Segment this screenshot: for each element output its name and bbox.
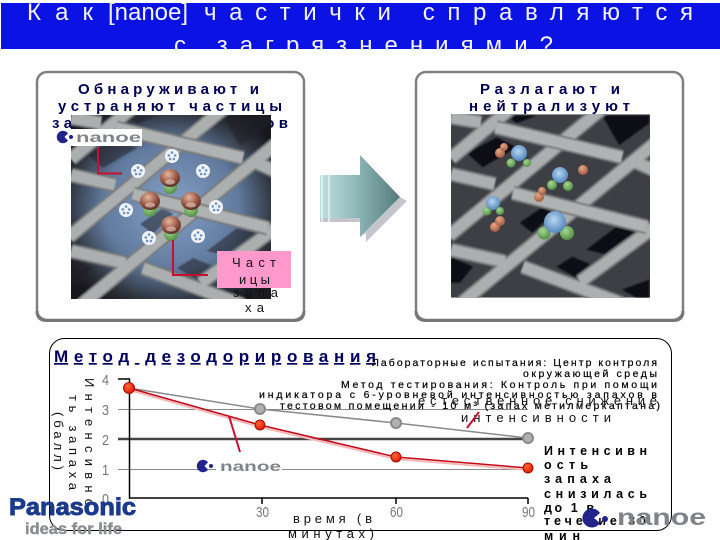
test conditions note: окружающей среды (523, 368, 657, 380)
nanoe series (124, 382, 533, 473)
axis tick labels: 3 (102, 402, 109, 419)
title text (27, 0, 693, 59)
illustration: fabric with decomposed molecules (449, 108, 656, 304)
panel: deodorization method (50, 338, 672, 540)
y-axis label: (балл) (51, 412, 66, 470)
callout: odor particles: ха (245, 300, 265, 315)
axis tick labels: 1 (102, 462, 109, 479)
test conditions note: Метод тестирования: Контроль при помощи (341, 379, 657, 391)
chart: odor intensity over time (51, 372, 535, 521)
y-axis label: Интенсивно (82, 378, 97, 506)
Panasonic logo: ideas for life (25, 521, 122, 538)
nanoe logo on chart (197, 458, 282, 474)
callout: odor particles (217, 251, 291, 315)
result note: запаха (544, 472, 612, 486)
panel heading: detect and remove: устраняют частицы (58, 98, 282, 115)
label: natural decline of intensity: естественное снижение (418, 393, 657, 408)
axis tick labels (102, 372, 535, 521)
axis tick labels: 90 (522, 504, 535, 521)
red leader to nanoe series (229, 416, 240, 452)
Panasonic logo (9, 494, 136, 538)
title text: с загрязнениями? (174, 32, 553, 59)
test conditions note: Лабораторные испытания: Центр контроля (372, 357, 657, 369)
callout: odor particles: ицы (239, 272, 270, 287)
axis tick labels: 30 (256, 504, 269, 521)
red leader to odor particles (173, 240, 208, 275)
panel heading: detect and remove: Обнаруживают и (78, 81, 259, 98)
nanoe logo on illustration (57, 129, 142, 146)
nanoe logo on illustration: nanoe (76, 129, 141, 145)
panel heading: deodorization method: Метод дезодорирования (54, 347, 376, 366)
result note: ость (544, 458, 588, 472)
axis tick labels: 0 (102, 491, 109, 508)
label: natural decline of intensity: интенсивности (461, 410, 611, 425)
y-axis label: ть запаха (66, 395, 81, 491)
illustration: fabric with nanoe particles and odor molecules (69, 109, 277, 305)
panel heading: decompose: Разлагают и (480, 81, 620, 98)
y-axis label (51, 378, 97, 506)
result note: до 1 в (544, 501, 594, 515)
panel heading: detect and remove (52, 81, 288, 132)
test conditions note (259, 357, 660, 412)
nanoe logo bottom right (582, 504, 706, 530)
panel: detect and remove odor particles (37, 72, 304, 320)
red leader to natural decline series (467, 412, 479, 428)
axis tick labels: 2 (102, 432, 109, 449)
title banner (0, 0, 720, 59)
result note: снизилась (544, 487, 647, 501)
nanoe logo bottom right: nanoe (617, 504, 706, 530)
arrow (320, 155, 407, 242)
test conditions note: индикатора с 6-уровневой интенсивностью запахов в (259, 389, 657, 401)
gridlines and axes (118, 379, 528, 504)
panel heading: decompose: нейтрализуют (469, 98, 630, 115)
test conditions note: тестовом помещении - 10 м³ (запах метилмеркаптана) (280, 400, 660, 412)
result note: течение 30 (544, 514, 646, 528)
red leader to nanoe particles (98, 147, 122, 174)
label: natural decline of intensity (418, 393, 657, 425)
axis tick labels: 4 (102, 372, 109, 389)
natural decline series (129, 388, 533, 443)
result note (544, 444, 647, 540)
callout: odor particles: Част (232, 255, 276, 270)
axis tick labels: 60 (390, 504, 403, 521)
result note: Интенсивн (544, 444, 647, 458)
callout: odor particles: запа (233, 285, 279, 300)
panel heading: decompose (469, 81, 630, 115)
nanoe logo on chart: nanoe (220, 458, 281, 474)
panel: decompose and neutralize (416, 72, 683, 320)
panel heading: detect and remove: загрязнений запахов (52, 115, 288, 132)
x-axis label (288, 511, 374, 540)
x-axis label: время (в (293, 511, 372, 526)
Panasonic logo: Panasonic (9, 494, 136, 521)
